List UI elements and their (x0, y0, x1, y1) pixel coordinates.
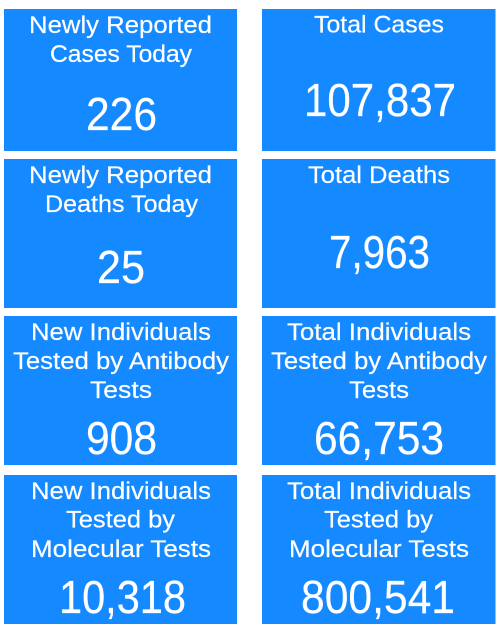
number: 66,753: 66,753 (314, 412, 444, 464)
heading: newly reported cases today (29, 12, 212, 68)
panel: new individuals antibody tests (4, 316, 237, 465)
panel: total deaths (262, 159, 496, 308)
heading: new individuals tested by molecular tests: New Individuals (31, 478, 211, 505)
number: 10,318: 10,318 (59, 571, 186, 623)
heading: total individuals tested by molecular tests: Total Individuals (287, 478, 471, 505)
heading: total individuals tested by antibody tests (271, 319, 488, 404)
panel: total individuals antibody tests (262, 316, 496, 465)
number: 25: 25 (97, 241, 145, 293)
number: 908: 908 (86, 412, 157, 464)
panel: total cases (262, 9, 496, 151)
number: 107,837: 107,837 (304, 74, 456, 126)
panel: newly reported deaths today (4, 159, 237, 308)
heading: new individuals tested by antibody tests: New Individuals (31, 319, 211, 346)
heading: newly reported cases today: Cases Today (50, 41, 193, 68)
heading: total individuals tested by molecular tests: Molecular Tests (289, 536, 469, 563)
number: 7,963: 7,963 (329, 226, 430, 278)
number: 800,541: 800,541 (301, 571, 455, 623)
number: 226: 226 (86, 88, 157, 140)
heading: total individuals tested by molecular tests: Tested by (324, 506, 434, 534)
heading: new individuals tested by antibody tests: Tests (90, 377, 152, 404)
heading: newly reported deaths today: Newly Reported (29, 162, 212, 189)
heading: total deaths: Total Deaths (308, 162, 450, 189)
panel: total individuals molecular tests (262, 475, 496, 624)
heading: total individuals tested by antibody tests: Total Individuals (287, 319, 471, 346)
panel: newly reported cases today (4, 9, 237, 151)
heading: new individuals tested by molecular tests: Molecular Tests (31, 536, 211, 563)
heading: new individuals tested by antibody tests (13, 319, 230, 404)
heading: new individuals tested by molecular tests (31, 478, 211, 563)
heading: newly reported deaths today (29, 162, 212, 218)
heading: total cases: Total Cases (314, 12, 444, 38)
heading: newly reported cases today: Newly Reported (29, 12, 212, 39)
panel: new individuals molecular tests (4, 475, 237, 624)
heading: new individuals tested by molecular tests: Tested by (66, 506, 176, 534)
heading: total individuals tested by antibody tests: Tested by Antibody (271, 348, 488, 375)
heading: newly reported deaths today: Deaths Today (45, 191, 199, 218)
heading: total individuals tested by antibody tests: Tests (349, 377, 409, 404)
heading: total individuals tested by molecular tests (287, 478, 471, 563)
heading: new individuals tested by antibody tests: Tested by Antibody (13, 348, 230, 375)
